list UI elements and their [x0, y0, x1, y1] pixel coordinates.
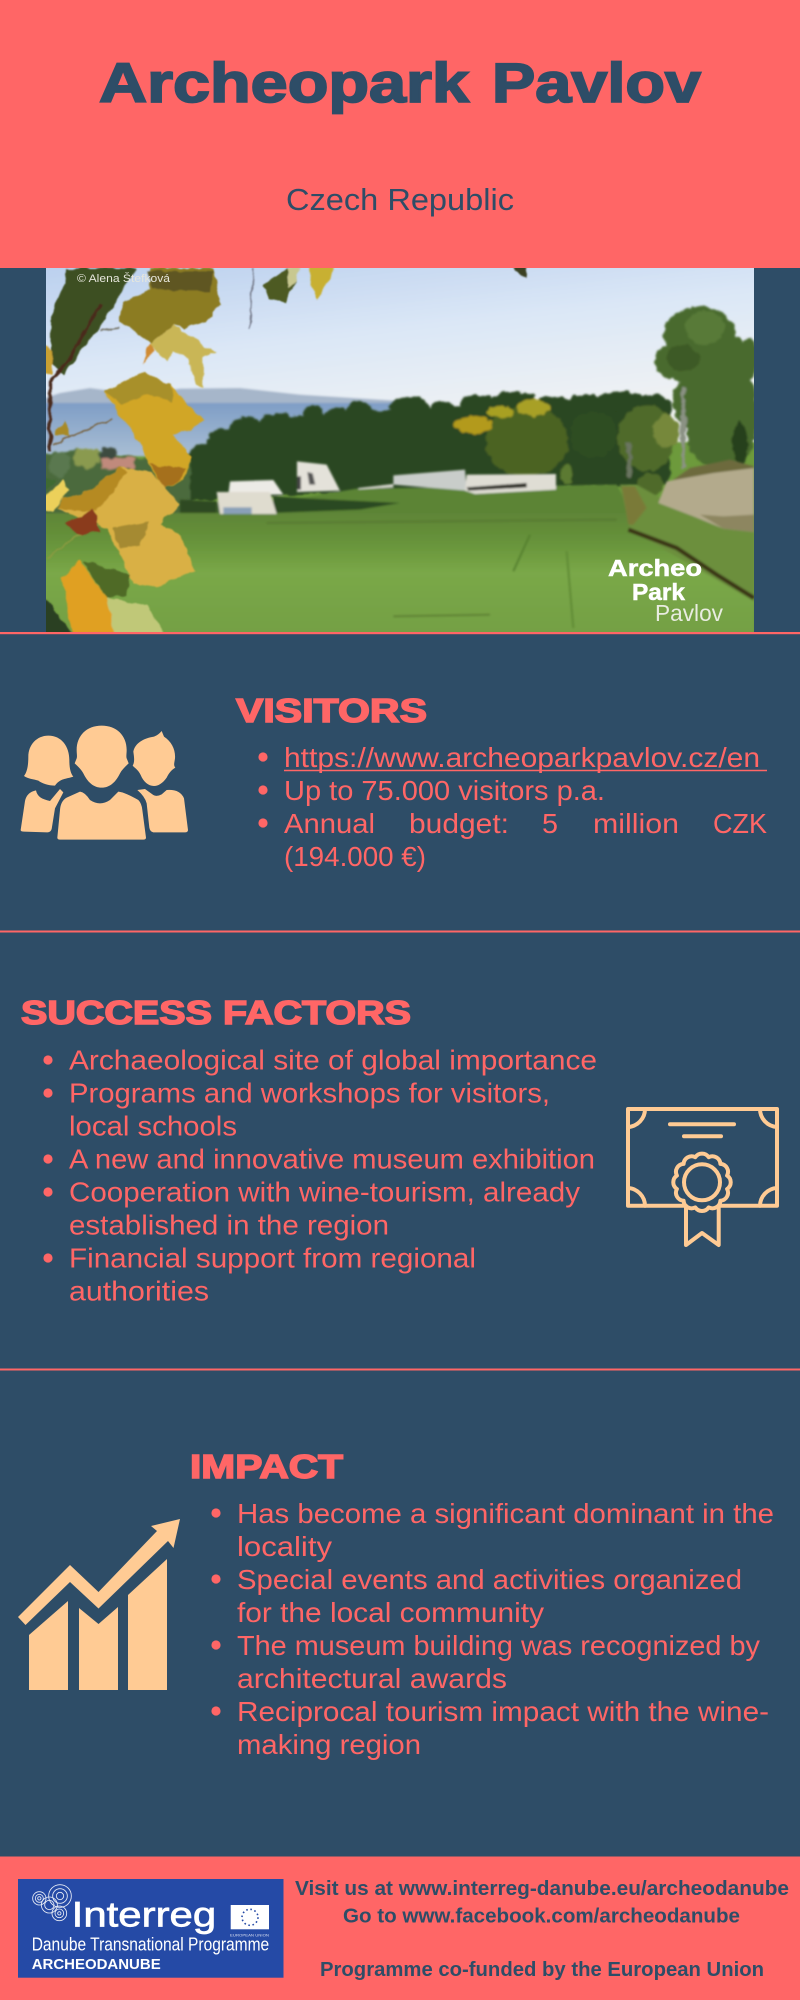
panel: impact [18, 1448, 774, 1760]
footer links and funding note: Go to www.facebook.com/archeodanube [343, 1906, 740, 1928]
photo logo: Archeo Park Pavlov: Archeo [608, 555, 702, 581]
icon: certificate [628, 1109, 777, 1245]
footer band [0, 1856, 800, 2000]
title: Pavlov [492, 51, 701, 114]
list: visitors: Annual [284, 808, 375, 839]
heading: impact: IMPACT [190, 1448, 343, 1485]
list: visitors: CZK [713, 808, 767, 839]
logo: Interreg: Interreg [72, 1896, 216, 1935]
logo: Interreg: Danube Transnational Programme [32, 1935, 269, 1955]
list: success factors [43, 1044, 597, 1306]
photo logo: Archeo Park Pavlov: Park [632, 579, 685, 605]
heading: success factors: SUCCESS FACTORS [21, 994, 411, 1031]
list: success factors: Financial support from regional [69, 1242, 476, 1274]
footer links and funding note: Visit us at www.interreg-danube.eu/archeodanube [295, 1878, 789, 1900]
photo logo: Archeo Park Pavlov [608, 558, 723, 621]
list: success factors: authorities [69, 1276, 209, 1306]
list: success factors: Cooperation with wine-tourism, already [69, 1176, 580, 1208]
photo: Archeopark landscape [30, 262, 760, 635]
list: visitors: (194.000 €) [284, 841, 426, 872]
list: visitors: 5 [542, 808, 558, 839]
list: impact [211, 1498, 774, 1760]
icon: Interreg swirls [33, 1885, 71, 1921]
title [99, 51, 701, 114]
heading: visitors: VISITORS [236, 692, 427, 729]
list: impact: Has become a significant dominant in the [237, 1498, 774, 1529]
list: success factors: A new and innovative museum exhibition [69, 1144, 595, 1174]
list: visitors: budget: [409, 808, 509, 839]
panel: success factors [21, 994, 777, 1306]
list: visitors [258, 742, 767, 872]
list: success factors: Archaeological site of global importance [69, 1044, 597, 1076]
list: impact: Reciprocal tourism impact with the wine- [237, 1696, 769, 1727]
icon: group of people [21, 726, 188, 840]
icon: EU flag: EUROPEAN UNION [230, 1933, 269, 1938]
footer links and funding note [295, 1878, 789, 1981]
list: visitors: Up to 75.000 visitors p.a. [284, 775, 605, 806]
photo credit: © Alena Štefková [77, 272, 171, 285]
icon: growth chart [18, 1519, 180, 1690]
logo: Interreg: ARCHEODANUBE [32, 1956, 161, 1973]
title: Archeopark [99, 51, 470, 114]
list: impact: for the local community [237, 1597, 544, 1628]
list: success factors: established in the region [69, 1210, 389, 1240]
list: visitors: https://www.archeoparkpavlov.cz/en [284, 742, 760, 773]
photo logo: Archeo Park Pavlov: Pavlov [655, 600, 723, 626]
logo: Interreg [18, 1879, 284, 1978]
list: impact: The museum building was recognized by [237, 1630, 760, 1661]
list: impact: architectural awards [237, 1663, 507, 1694]
list: impact: locality [237, 1531, 332, 1562]
list: success factors: Programs and workshops for visitors, [69, 1078, 550, 1108]
header band [0, 0, 800, 268]
icon: EU flag [230, 1905, 269, 1938]
panel: visitors [21, 692, 767, 872]
list: impact: making region [237, 1729, 421, 1760]
list: visitors: million [593, 808, 679, 839]
footer links and funding note: Programme co-funded by the European Union [320, 1959, 764, 1981]
subtitle: Czech Republic [286, 182, 514, 217]
list: success factors: local schools [69, 1110, 237, 1142]
list: impact: Special events and activities organized [237, 1564, 742, 1595]
